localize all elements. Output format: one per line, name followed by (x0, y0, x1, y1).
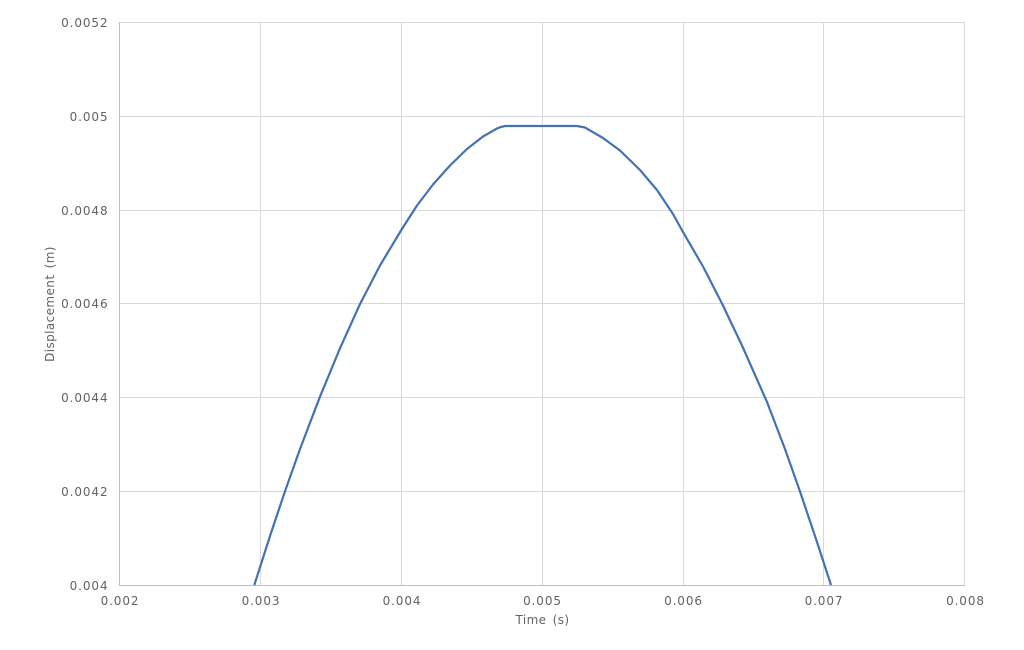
x axis tick labels: 0.002 (101, 594, 139, 608)
y axis tick labels: 0.0046 (61, 297, 108, 311)
x axis tick labels: 0.008 (946, 594, 985, 608)
y axis tick labels: 0.0052 (61, 16, 108, 30)
x axis tick labels (101, 594, 985, 608)
x axis tick labels: 0.005 (523, 594, 562, 608)
x axis tick labels: 0.006 (664, 594, 703, 608)
x axis tick labels: 0.004 (383, 594, 421, 608)
x axis tick labels: 0.007 (805, 594, 843, 608)
y axis tick labels: 0.004 (70, 579, 108, 593)
y axis tick labels: 0.0042 (61, 485, 108, 499)
y axis tick labels: 0.0044 (61, 391, 108, 405)
displacement curve (254, 126, 831, 585)
y axis title: Displacement (m) (43, 246, 57, 362)
y axis tick labels (61, 16, 108, 593)
x axis tick labels: 0.003 (242, 594, 280, 608)
y axis tick labels: 0.0048 (61, 204, 108, 218)
y axis tick labels: 0.005 (70, 110, 108, 124)
x axis title: Time (s) (514, 613, 570, 627)
